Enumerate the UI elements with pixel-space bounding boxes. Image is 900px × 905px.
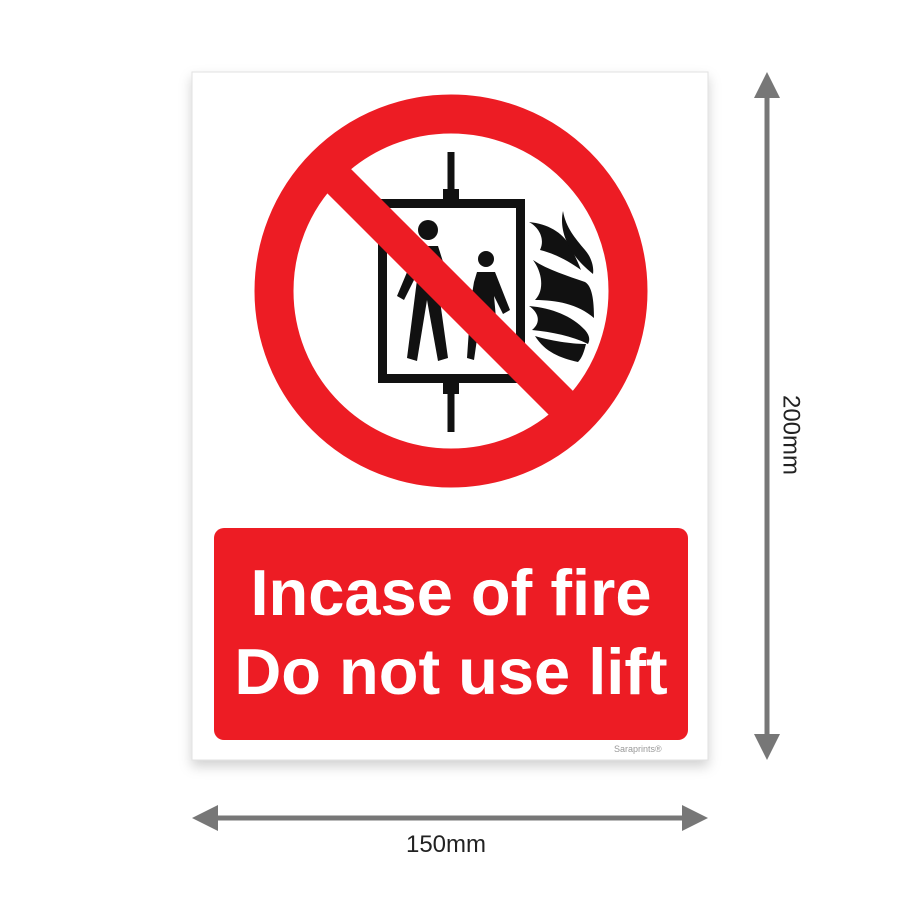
red text panel (214, 528, 688, 740)
label: 150mm: 150mm (406, 831, 486, 858)
red text panel: Incase of fire (251, 556, 651, 629)
brand mark: Saraprints® (614, 744, 662, 754)
red text panel: Do not use lift (234, 635, 668, 708)
sign panel (192, 72, 708, 760)
prohibition circle with slash (274, 114, 628, 468)
pictogram: lift with people and fire (382, 152, 594, 432)
arrow: height dimension (754, 72, 780, 760)
label: 200mm: 200mm (778, 395, 805, 475)
arrow: width dimension (192, 805, 708, 831)
